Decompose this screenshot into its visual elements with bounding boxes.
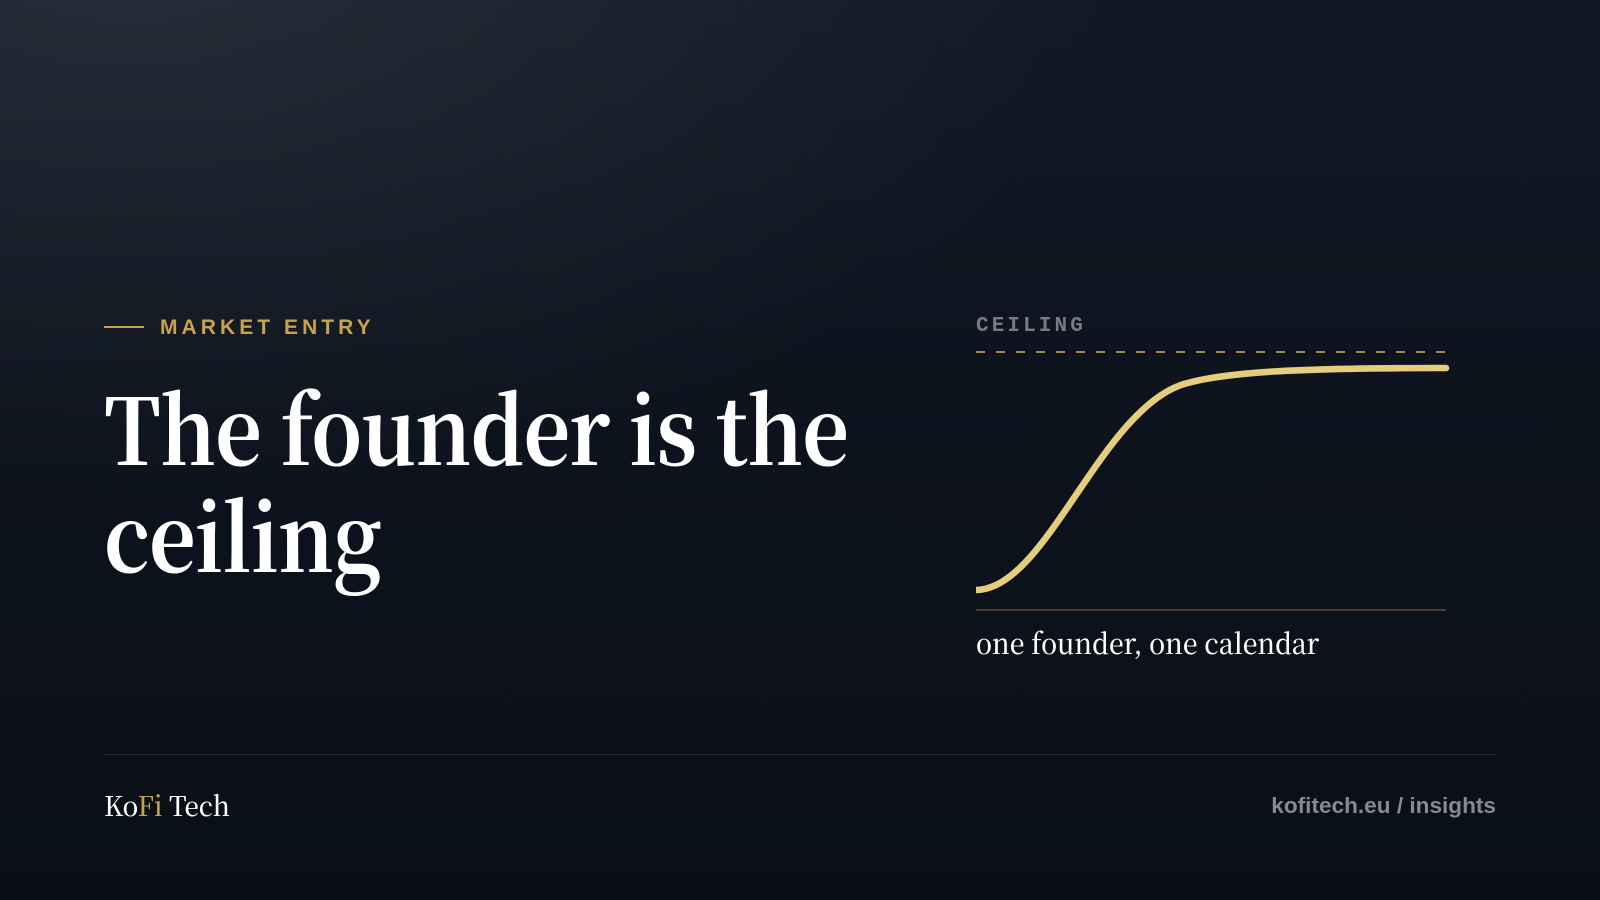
chart label: ceiling: CEILING [976,315,1086,338]
title [104,360,848,599]
eyebrow rule [104,326,144,328]
title: ceiling [104,467,381,599]
brand wordmark: KoFi Tech [104,784,230,824]
chart: founder ceiling curve [976,351,1450,611]
growth curve [976,368,1446,590]
chart caption: one founder, one calendar [976,622,1319,663]
baseline axis [976,609,1446,611]
footer divider [104,754,1496,755]
title: The founder is the [104,360,848,492]
ceiling dashed line [976,351,1446,353]
eyebrow label: MARKET ENTRY [160,316,375,339]
footer link: kofitech.eu / insights [1271,793,1496,818]
